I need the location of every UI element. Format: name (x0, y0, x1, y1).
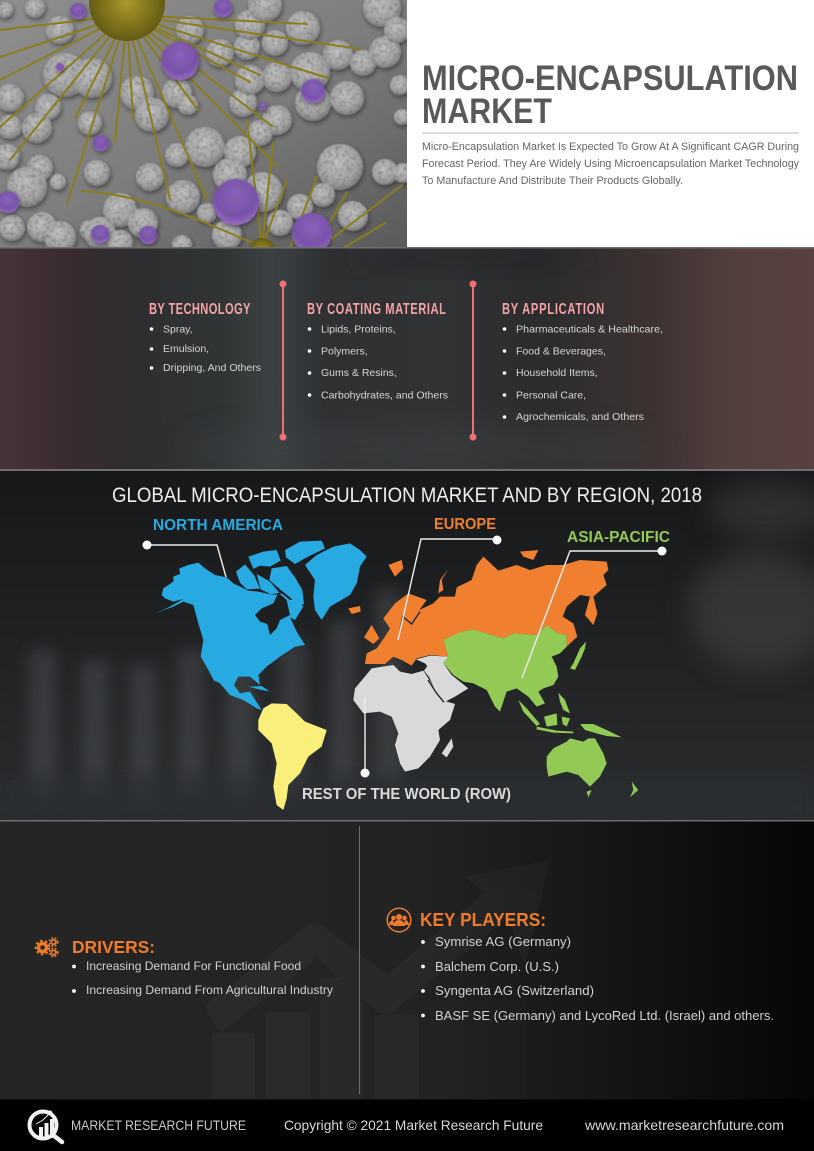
title: MARKET (422, 92, 552, 131)
connector: asia-pacific (522, 546, 666, 678)
column: by coating material (307, 300, 448, 402)
column: by coating material: Carbohydrates, and Others (321, 390, 448, 402)
drivers list: Increasing Demand For Functional Food (86, 959, 301, 973)
column: by coating material: BY COATING MATERIAL (307, 300, 446, 317)
panel: regional map (0, 471, 814, 822)
column: by technology (149, 300, 261, 374)
panel: drivers and key players (0, 822, 814, 1100)
region: asia-pacific (443, 625, 638, 797)
column: by application: Food & Beverages, (516, 346, 606, 358)
connector: rest of the world (360, 697, 370, 778)
map heading: GLOBAL MICRO-ENCAPSULATION MARKET AND BY REGION, 2018 (112, 484, 702, 507)
label: north america: NORTH AMERICA (153, 517, 283, 534)
urchin cell (89, 0, 165, 41)
column: by coating material: Gums & Resins, (321, 367, 397, 379)
drivers block (36, 937, 333, 997)
intro text: To Manufacture And Distribute Their Products Globally. (422, 175, 683, 187)
column: by technology: Emulsion, (163, 343, 209, 355)
key players list (421, 935, 774, 1023)
label: europe: EUROPE (434, 516, 496, 533)
column: by application: BY APPLICATION (502, 300, 604, 317)
label: asia-pacific: ASIA-PACIFIC (567, 529, 670, 546)
divider 1 (280, 280, 286, 440)
icon: people in target (387, 908, 411, 932)
icon: gears (36, 938, 58, 957)
title (422, 59, 798, 131)
map: eastern hemisphere (348, 550, 638, 797)
column: by technology: BY TECHNOLOGY (149, 300, 251, 317)
panel: segmentation (0, 244, 814, 478)
column: by application: Personal Care, (516, 390, 586, 402)
key players list: Syngenta AG (Switzerland) (435, 984, 594, 998)
intro text (422, 141, 800, 187)
key players heading: KEY PLAYERS: (420, 910, 546, 930)
drivers heading: DRIVERS: (72, 937, 155, 957)
column: by coating material: Lipids, Proteins, (321, 324, 396, 336)
region: north america (155, 541, 367, 710)
drivers list (72, 959, 333, 997)
watermark: growth chart (205, 860, 550, 1098)
footer brand: MARKET RESEARCH FUTURE (71, 1117, 246, 1133)
connector: north america (142, 540, 226, 577)
divider 2 (470, 280, 476, 440)
column: by coating material: Polymers, (321, 346, 368, 358)
column: by application: Agrochemicals, and Others (516, 411, 644, 423)
hudson bay (255, 593, 290, 635)
region: europe and russia (348, 550, 608, 666)
key players list: Balchem Corp. (U.S.) (435, 960, 559, 974)
column: by application (502, 300, 663, 423)
drivers list: Increasing Demand From Agricultural Industry (86, 983, 333, 997)
key players list: Symrise AG (Germany) (435, 935, 571, 949)
column: by technology: Spray, (163, 324, 193, 336)
footer (0, 1100, 814, 1151)
icon: logo magnifier with bars (30, 1110, 62, 1142)
connector: europe (398, 536, 502, 640)
footer copyright: Copyright © 2021 Market Research Future (284, 1117, 543, 1133)
key players list: BASF SE (Germany) and LycoRed Ltd. (Israel) and others. (435, 1009, 774, 1023)
footer website: www.marketresearchfuture.com (584, 1117, 784, 1133)
region: south america (258, 703, 327, 810)
photo: microcapsule micrograph (0, 0, 413, 266)
intro text: Forecast Period. They Are Widely Using Microencapsulation Market Technology (422, 158, 800, 170)
label: rest of the world: REST OF THE WORLD (ROW) (302, 786, 511, 803)
column: by technology: Dripping, And Others (163, 362, 261, 374)
key players block (387, 908, 774, 1023)
region: rest of the world (353, 656, 468, 772)
column: by application: Household Items, (516, 367, 598, 379)
column: by application: Pharmaceuticals & Healthcare, (516, 324, 663, 336)
map: americas (155, 541, 367, 810)
intro text: Micro-Encapsulation Market Is Expected To Grow At A Significant CAGR During (422, 141, 799, 153)
